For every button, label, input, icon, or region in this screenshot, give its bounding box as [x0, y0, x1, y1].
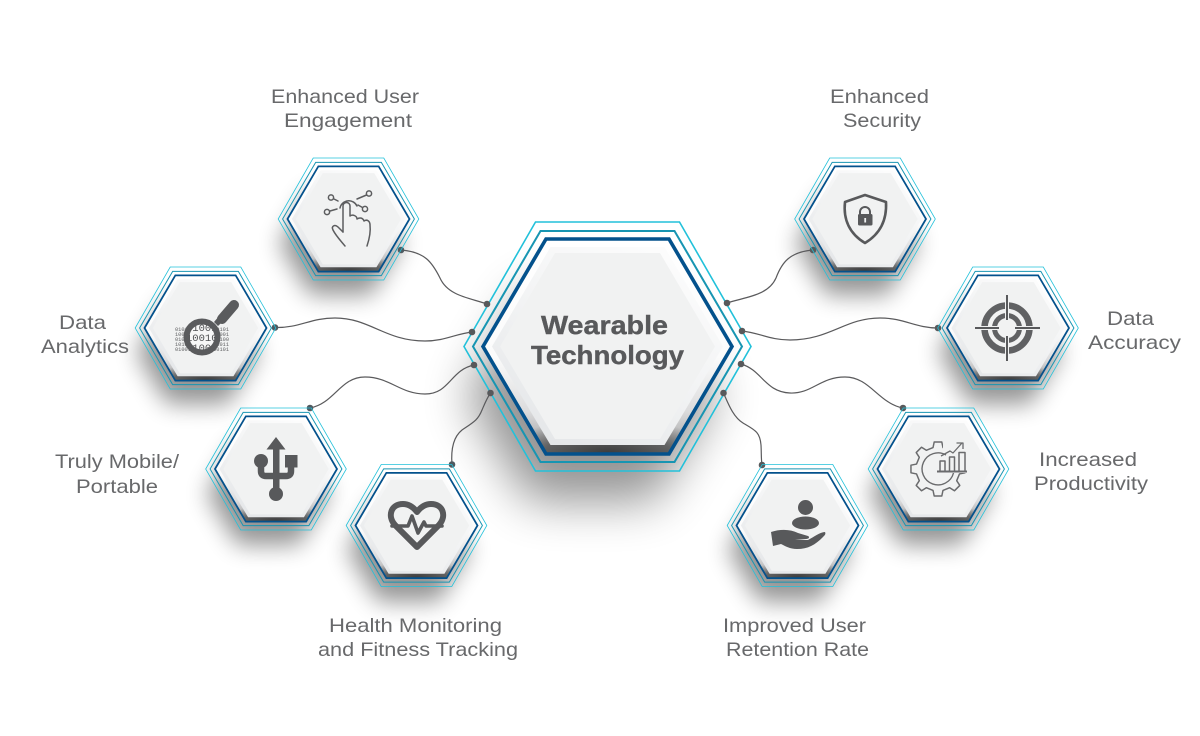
icon: target crosshair — [975, 295, 1040, 361]
connector: enhanced security — [724, 247, 816, 306]
label: Truly Mobile/ Portable: Portable — [76, 476, 158, 498]
connector: truly mobile — [307, 362, 477, 411]
label: Health Monitoring and Fitness Tracking: Health Monitoring — [329, 615, 502, 637]
icon: usb — [254, 437, 298, 501]
label: Data Analytics: Data — [59, 312, 106, 334]
icon: touch hand — [324, 191, 372, 246]
hexagon: truly mobile — [206, 408, 346, 530]
icon: magnifier over binary: 01001010010010100 — [175, 337, 229, 343]
icon: magnifier over binary: 10010 — [186, 333, 218, 345]
label: Increased Productivity: Increased — [1039, 449, 1137, 471]
label: Enhanced User Engagement — [271, 86, 420, 132]
hexagon: health monitoring — [346, 464, 487, 587]
connector: health monitoring — [449, 390, 494, 468]
label: Data Accuracy — [1088, 308, 1181, 354]
label: Improved User Retention Rate: Retention Rate — [726, 639, 869, 661]
label: Health Monitoring and Fitness Tracking: and Fitness Tracking — [318, 639, 518, 661]
hexagon: improved user retention — [727, 464, 868, 587]
icon: magnifier over binary: 01001 — [186, 343, 218, 355]
label: Improved User Retention Rate — [723, 615, 869, 661]
icon: person on open hand — [771, 500, 825, 549]
icon: shield with lock — [845, 195, 886, 243]
central title: Wearable — [541, 310, 668, 340]
label: Enhanced Security — [830, 86, 929, 132]
icon: magnifier over binary: 01001 — [186, 323, 218, 335]
hexagon: enhanced security — [795, 158, 935, 280]
label: Enhanced User Engagement: Engagement — [284, 110, 413, 132]
central title — [531, 310, 685, 370]
label: Increased Productivity: Productivity — [1034, 473, 1148, 495]
label: Data Analytics — [41, 312, 129, 358]
connector: data accuracy — [739, 318, 941, 340]
label: Data Accuracy: Accuracy — [1088, 332, 1181, 354]
label: Data Accuracy: Data — [1107, 308, 1154, 330]
connector: user engagement — [398, 247, 490, 307]
hexagon: increased productivity — [868, 408, 1009, 530]
label: Truly Mobile/ Portable — [55, 451, 180, 498]
label: Enhanced Security: Security — [843, 110, 921, 132]
label: Enhanced Security: Enhanced — [830, 86, 929, 108]
connector: user retention — [720, 390, 765, 468]
icon: heart pulse — [391, 504, 443, 547]
icon: magnifier over binary: 01001010010100101 — [175, 347, 229, 353]
label: Enhanced User Engagement: Enhanced User — [271, 86, 420, 108]
label: Data Analytics: Analytics — [41, 336, 129, 358]
label: Truly Mobile/ Portable: Truly Mobile/ — [55, 451, 180, 473]
central hexagon: Wearable Technology — [464, 222, 751, 471]
label: Improved User Retention Rate: Improved User — [723, 615, 867, 637]
icon: magnifier over binary — [175, 302, 237, 355]
label: Increased Productivity — [1034, 449, 1148, 495]
drop shadows — [136, 192, 1061, 601]
icon: magnifier over binary: 01010010100100101 — [175, 327, 229, 333]
central title: Technology — [531, 340, 685, 370]
connector: increased productivity — [738, 361, 906, 411]
hexagon: data analytics — [135, 267, 276, 389]
hexagon: data accuracy — [938, 267, 1078, 389]
hexagon: enhanced user engagement — [278, 158, 419, 280]
label: Health Monitoring and Fitness Tracking — [318, 615, 518, 661]
connector: data analytics — [272, 318, 475, 341]
icon: magnifier over binary: 10100101001001011 — [175, 342, 229, 348]
icon: magnifier over binary: 10010100101001001 — [175, 332, 229, 338]
icon: gear with bar chart — [911, 440, 971, 496]
